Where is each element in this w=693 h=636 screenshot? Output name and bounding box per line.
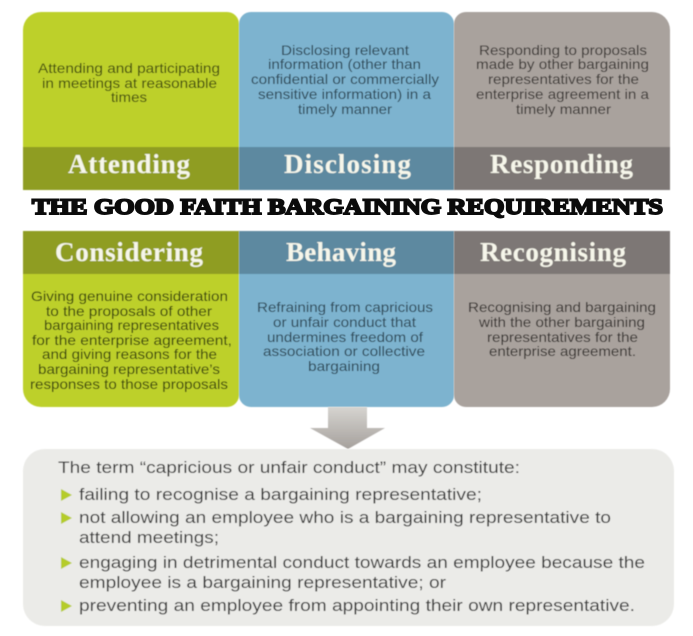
bullet 2: not allowing an employee who is a bargaining representative to	[79, 509, 611, 527]
considering description: Giving genuine consideration	[31, 289, 228, 304]
disclosing heading: Disclosing	[284, 149, 412, 179]
responding description: enterprise agreement in a	[476, 87, 649, 102]
disclosing description: information (other than	[268, 57, 421, 72]
behaving heading: Behaving	[286, 237, 396, 267]
title: THE GOOD FAITH BARGAINING REQUIREMENTS	[32, 194, 663, 219]
panel: responding	[454, 12, 670, 190]
disclosing description: confidential or commercially	[251, 72, 439, 87]
behaving description: undermines freedom of	[267, 330, 423, 345]
recognising description: representatives for the	[487, 330, 638, 345]
considering description: to the proposals of other	[46, 304, 212, 319]
bullet 3: employee is a bargaining representative; or	[79, 574, 447, 592]
considering heading: Considering	[55, 237, 204, 267]
attending description: times	[111, 90, 147, 105]
responding description: timely manner	[516, 102, 611, 117]
panel: recognising	[454, 231, 670, 407]
attending description: Attending and participating	[38, 61, 220, 76]
bullet 2: attend meetings;	[79, 529, 219, 547]
responding description: made by other bargaining	[476, 57, 649, 72]
responding description: representatives for the	[488, 72, 639, 87]
recognising description: Recognising and bargaining	[468, 300, 656, 315]
disclosing description: timely manner	[298, 102, 392, 117]
behaving description: Refraining from capricious	[257, 300, 433, 315]
considering description: for the enterprise agreement,	[32, 333, 232, 348]
panel: capricious conduct	[23, 449, 674, 626]
bullet 1: failing to recognise a bargaining representative;	[79, 486, 482, 504]
recognising description: enterprise agreement.	[489, 344, 636, 359]
recognising heading: Recognising	[480, 237, 626, 267]
behaving description: bargaining	[308, 359, 380, 374]
panel: behaving	[239, 231, 454, 407]
disclosing description: sensitive information) in a	[258, 87, 431, 102]
behaving description: or unfair conduct that	[273, 315, 416, 330]
arrow	[310, 407, 385, 449]
considering description: and giving reasons for the	[42, 347, 217, 362]
panel: disclosing	[239, 12, 454, 190]
considering description: bargaining representatives	[44, 318, 219, 333]
disclosing description: Disclosing relevant	[281, 43, 409, 58]
panel: attending	[23, 12, 239, 190]
attending heading: Attending	[68, 149, 190, 179]
bullet 3: engaging in detrimental conduct towards an employee because the	[79, 554, 645, 572]
considering description: responses to those proposals	[30, 377, 228, 392]
bullet 4: preventing an employee from appointing their own representative.	[79, 597, 635, 615]
considering description: bargaining representative’s	[38, 362, 220, 377]
responding description: Responding to proposals	[479, 43, 647, 58]
bullet 2	[61, 509, 611, 547]
behaving description: association or collective	[263, 344, 425, 359]
panel: considering	[23, 231, 239, 407]
bullet 3	[61, 554, 645, 592]
responding heading: Responding	[490, 149, 634, 179]
intro text: The term “capricious or unfair conduct” may constitute:	[58, 459, 520, 477]
recognising description: with the other bargaining	[478, 315, 645, 330]
attending description: in meetings at reasonable	[42, 76, 217, 91]
